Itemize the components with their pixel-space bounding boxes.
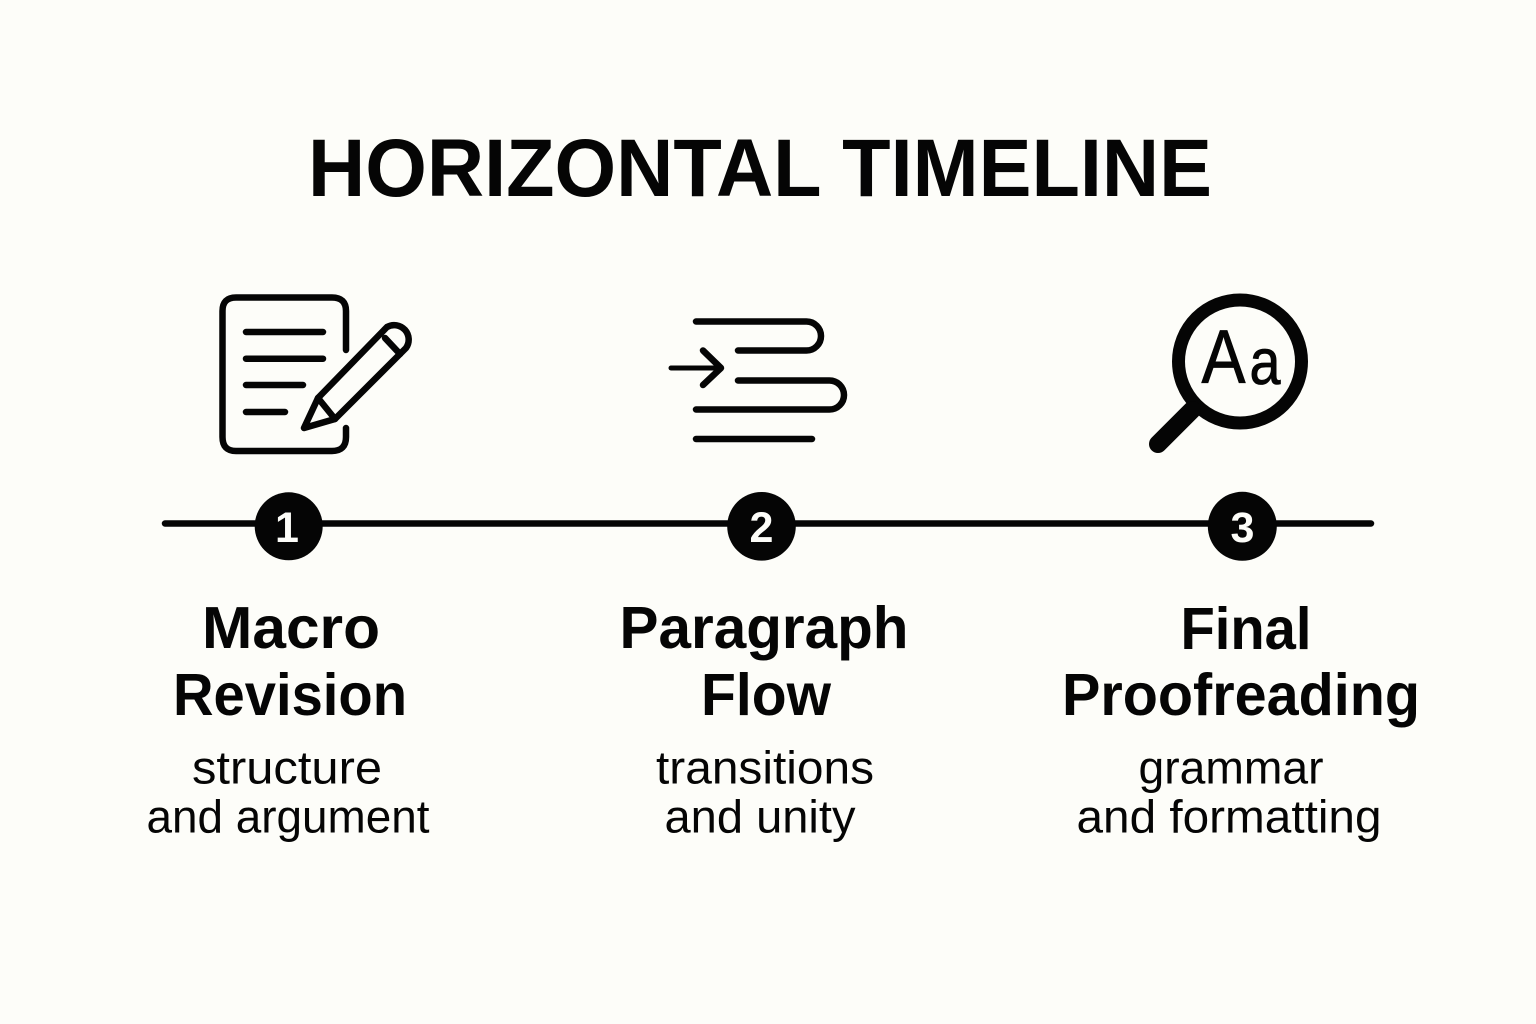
icon: magnifying glass with Aa <box>1158 300 1302 444</box>
marker 1: 1 <box>275 504 299 552</box>
marker 3 <box>1208 492 1277 561</box>
title: HORIZONTAL TIMELINE <box>308 123 1212 214</box>
marker 1 <box>255 492 323 560</box>
step 1 heading <box>173 595 407 728</box>
step 2 description: and unity <box>664 790 856 842</box>
step 3 heading <box>1062 596 1420 728</box>
marker 2 <box>727 492 796 561</box>
step 2 heading: Paragraph <box>620 595 908 661</box>
step 3 heading: Final <box>1180 596 1312 662</box>
step 1 heading: Macro <box>202 595 380 661</box>
step 3 description: and formatting <box>1076 790 1382 842</box>
step 1 description: and argument <box>146 790 430 842</box>
icon: magnifying glass with Aa: a <box>1250 325 1281 398</box>
step 1 heading: Revision <box>173 662 407 728</box>
icon: paragraph flow arrow and lines <box>671 322 844 439</box>
step 3 heading: Proofreading <box>1062 662 1420 728</box>
step 1 description: structure <box>192 742 382 794</box>
step 3 description <box>1076 742 1382 842</box>
step 2 heading: Flow <box>701 662 831 728</box>
step 2 description <box>656 742 874 842</box>
timeline line <box>165 520 1371 527</box>
step 1 description <box>146 742 430 842</box>
icon: document with pencil <box>222 298 409 451</box>
icon: magnifying glass with Aa: A <box>1202 315 1246 400</box>
step 2 heading <box>620 595 908 728</box>
step 3 description: grammar <box>1138 742 1324 794</box>
step 2 description: transitions <box>656 742 874 794</box>
marker 3: 3 <box>1231 504 1254 552</box>
marker 2: 2 <box>750 504 773 552</box>
